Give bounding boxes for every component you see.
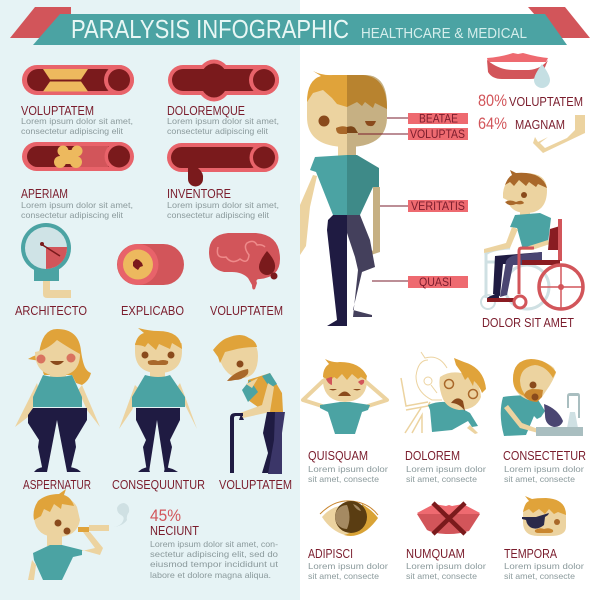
figure: overweight man <box>119 328 197 472</box>
callout: veritatis: VERITATIS <box>411 201 465 213</box>
stat: 64% magnam <box>478 114 565 133</box>
figure: elderly man with cane <box>213 335 285 474</box>
text: numquam: NUMQUAM <box>406 547 465 561</box>
text: tempora: Lorem ipsum dolor <box>504 561 584 571</box>
text: quisquam: Lorem ipsum dolor <box>308 464 388 474</box>
text: adipisci: Lorem ipsum dolor <box>308 561 388 571</box>
text: numquam: sit amet, consecte <box>406 571 477 581</box>
vessel: inventore <box>167 143 278 187</box>
text: inventore <box>167 187 279 220</box>
text: adipisci: ADIPISCI <box>308 547 353 561</box>
text: inventore: Lorem ipsum dolor sit amet, <box>167 200 279 210</box>
stat: 80% voluptatem: 80% <box>478 91 507 110</box>
icon: drooling mouth <box>487 53 550 88</box>
label: architecto: ARCHITECTO <box>15 304 87 318</box>
figure: man in wheelchair <box>481 170 583 309</box>
text: aperiam <box>21 187 133 220</box>
figure: smoking man <box>28 489 129 580</box>
label: dolor sit amet: DOLOR SIT AMET <box>482 316 574 330</box>
text: doloremque <box>167 104 279 136</box>
icon: artery cross-section <box>117 244 184 285</box>
text: consectetur: sit amet, consecte <box>504 474 575 484</box>
text: numquam: Lorem ipsum dolor <box>406 561 486 571</box>
callout: 45% neciunt: Lorem ipsum dolor sit amet, con- <box>150 539 278 549</box>
vessel: doloremque <box>168 60 279 102</box>
label: explicabo: EXPLICABO <box>121 304 184 318</box>
text: consectetur: CONSECTETUR <box>503 449 586 463</box>
figure: vomiting <box>501 359 583 436</box>
text: quisquam: QUISQUAM <box>308 449 368 463</box>
callout: 45% neciunt: NECIUNT <box>150 524 199 538</box>
text: tempora: TEMPORA <box>504 547 558 561</box>
stat: 64% magnam: MAGNAM <box>515 118 565 132</box>
figure: paralysed man, split shading <box>300 71 387 326</box>
text: dolorem: sit amet, consecte <box>406 474 477 484</box>
header banner <box>10 7 590 45</box>
panel: left background <box>0 0 300 600</box>
figure: headache <box>303 359 387 434</box>
vessel: voluptatem <box>22 65 134 95</box>
text: adipisci: sit amet, consecte <box>308 571 379 581</box>
vessel: aperiam <box>22 142 134 171</box>
title: PARALYSIS INFOGRAPHIC <box>71 14 349 44</box>
icon: eye <box>320 501 378 536</box>
figure: dizziness <box>401 352 486 434</box>
callout: veritatis <box>380 200 468 213</box>
callout: 45% neciunt: eiusmod tempor incididunt ut <box>150 559 279 569</box>
text: dolorem <box>405 449 486 484</box>
subtitle: HEALTHCARE & MEDICAL <box>361 25 527 42</box>
stat: 64% magnam: 64% <box>478 114 507 133</box>
text: adipisci <box>308 547 388 581</box>
text: aperiam: consectetur adipiscing elit <box>21 210 124 220</box>
icon: pressure gauge <box>21 223 71 298</box>
text: doloremque: consectetur adipiscing elit <box>167 126 269 136</box>
callout: 45% neciunt: labore et dolore magna aliqua. <box>150 570 271 580</box>
text: consectetur: Lorem ipsum dolor <box>504 464 584 474</box>
icon: face with eye patch <box>522 496 566 536</box>
text: voluptatem <box>21 104 133 136</box>
callout: quasi <box>372 276 468 289</box>
text: inventore: INVENTORE <box>167 187 231 201</box>
label: aspernatur: ASPERNATUR <box>23 478 91 492</box>
stat: 80% voluptatem: VOLUPTATEM <box>509 95 583 109</box>
callout: beatae: BEATAE <box>419 114 458 126</box>
text: dolorem: Lorem ipsum dolor <box>406 464 486 474</box>
text: aperiam: Lorem ipsum dolor sit amet, <box>21 200 133 210</box>
text: inventore: consectetur adipiscing elit <box>167 210 270 220</box>
text: dolorem: DOLOREM <box>405 449 460 463</box>
callout: voluptas <box>358 128 468 141</box>
text: aperiam: APERIAM <box>21 187 68 201</box>
text: voluptatem: VOLUPTATEM <box>21 104 94 118</box>
callout: quasi: QUASI <box>419 277 452 289</box>
label: voluptatem elderly: VOLUPTATEM <box>219 478 292 492</box>
callout: 45% neciunt: sectetur adipiscing elit, sed do <box>150 549 278 559</box>
text: consectetur <box>503 449 586 484</box>
text: tempora <box>504 547 584 581</box>
text: quisquam: sit amet, consecte <box>308 474 379 484</box>
icon: crossed-out lips <box>417 503 480 534</box>
text: numquam <box>406 547 486 581</box>
callout: 45% neciunt: 45% <box>150 506 181 525</box>
stat: 80% voluptatem <box>478 91 583 110</box>
icon: brain with bleed <box>209 233 280 290</box>
text: tempora: sit amet, consecte <box>504 571 575 581</box>
text: voluptatem: Lorem ipsum dolor sit amet, <box>21 116 133 126</box>
callout: 45% neciunt <box>150 506 279 580</box>
text: doloremque: DOLOREMQUE <box>167 104 245 118</box>
icon: limp arm <box>533 115 585 153</box>
label: voluptatem: VOLUPTATEM <box>210 304 283 318</box>
callout: voluptas: VOLUPTAS <box>410 129 465 141</box>
text: voluptatem: consectetur adipiscing elit <box>21 126 124 136</box>
label: consequuntur: CONSEQUUNTUR <box>112 478 205 492</box>
text: quisquam <box>308 449 388 484</box>
figure: overweight woman <box>15 329 100 472</box>
text: doloremque: Lorem ipsum dolor sit amet, <box>167 116 279 126</box>
callout: beatae <box>387 113 468 126</box>
